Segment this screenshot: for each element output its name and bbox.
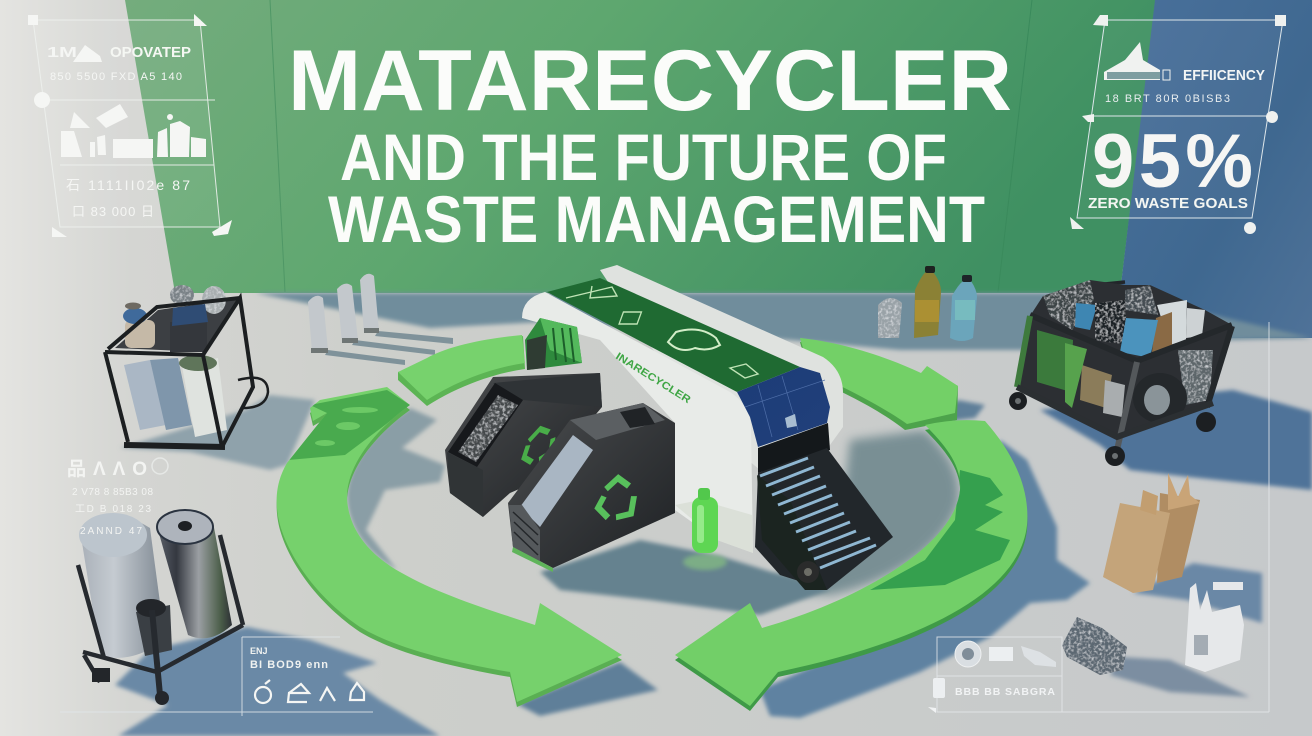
arrow: large left ring arc: [277, 387, 622, 707]
rack: left recycled materials: [105, 285, 268, 447]
machine body: [522, 265, 843, 553]
paper bags: [1103, 473, 1200, 593]
panel: top-right efficiency card: [1070, 15, 1286, 234]
panel: top-left data card: 石 1111II02e 87: [66, 177, 190, 193]
green waste block: [525, 318, 582, 370]
rear waste bin: [445, 373, 602, 517]
panel: lower-left icon row: BI BOD9 enn: [250, 659, 328, 671]
machine green top panel: [547, 278, 800, 392]
machine interior: [758, 423, 830, 473]
bottles and can: [878, 266, 977, 341]
rock: [1062, 617, 1127, 675]
panel: top-right efficiency card: EFFIICENCY: [1183, 68, 1265, 84]
arrow: upper-right ring segment: [800, 338, 958, 430]
machine blue window: [737, 367, 830, 447]
panel: lower-right materials: [928, 322, 1269, 713]
text block: lower-left labels: [67, 458, 168, 537]
panel: top-left data card: 口 83 000 日: [72, 204, 154, 219]
text block: lower-left labels: 2ANND 47: [80, 526, 142, 537]
icon: building: [1104, 42, 1170, 80]
title: AND THE FUTURE OF: [340, 120, 947, 194]
floor shadows: [115, 293, 1312, 736]
machine: Matarecycler: [445, 265, 893, 590]
cart: right recycled materials: [1009, 280, 1232, 466]
panel: top-left data card: 1M: [47, 44, 77, 61]
title: [288, 33, 1012, 256]
arrow: large right ring arc: [675, 420, 1027, 711]
title: WASTE MANAGEMENT: [328, 182, 985, 256]
panel: top-right efficiency card: ZERO WASTE GOALS: [1088, 196, 1248, 212]
machine label: INARECYCLER: [613, 350, 693, 406]
icon: recycling jar decal: [1185, 582, 1244, 672]
icon: recycle on rear bin: [524, 422, 553, 468]
panel: top-left data card: 850 5500 FXD A5 140: [50, 71, 182, 83]
text block: lower-left labels: 品ΛΛO: [67, 458, 147, 480]
text block: lower-left labels: 工D B 018 23: [75, 504, 151, 515]
white bottles: [308, 274, 379, 353]
icon: recycle on front bin: [598, 475, 634, 521]
panel: lower-left icon row: ENJ: [250, 646, 268, 656]
front waste bin: [508, 403, 675, 572]
green bottle: [683, 488, 727, 570]
text block: lower-left labels: 2 V78 8 85B3 08: [72, 487, 153, 498]
panel: top-right efficiency card: 18 BRT 80R 0BISB3: [1105, 93, 1230, 105]
panel: top-left data card: OPOVATEP: [110, 44, 191, 61]
panel: lower-right materials: BBB BB SABGRA: [955, 686, 1055, 698]
canisters: lower left: [78, 510, 243, 705]
arrow: upper-left ring segment: [398, 335, 525, 406]
panel: lower-left icon row: [60, 637, 373, 716]
title: MATARECYCLER: [288, 33, 1012, 129]
panel: top-left data card: [28, 14, 232, 237]
panel: top-right efficiency card: 95%: [1092, 119, 1253, 204]
conveyor: [755, 448, 893, 590]
